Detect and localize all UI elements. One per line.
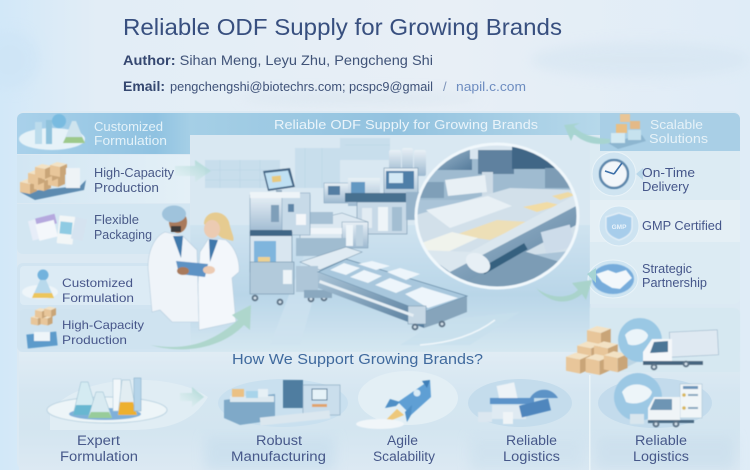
stage: reliable logistics one [468,379,572,427]
gmp certified item: GMP Certified [642,219,722,233]
customized formulation band: Customized [94,120,163,134]
stage labels: Reliable [635,433,687,448]
scalable solutions band [600,113,740,151]
customized formulation row: Customized [62,276,133,290]
on-time delivery item: Delivery [642,180,690,194]
stage labels: Manufacturing [231,449,326,464]
customized formulation row [20,266,180,305]
title: Reliable ODF Supply for Growing Brands [123,14,562,40]
high-capacity production row [17,155,190,203]
panel: right feature list [536,113,740,304]
panel: lower left features [17,263,190,352]
email line: pengchengshi@biotechrs.com; pcspc9@gmail [170,79,433,94]
main panel background [17,111,740,470]
factory scene [190,135,590,352]
on-time delivery item [592,152,695,196]
flexible packaging row [17,204,190,254]
email line: napil.c.com [456,79,526,94]
panel: how we support growing brands [19,308,740,470]
arrow: scalable to band [564,123,610,144]
middle cabinet [300,212,368,250]
strategic partnership item: Strategic [642,262,692,276]
lower panel backdrop [19,352,740,470]
stage labels: Formulation [60,449,138,464]
stage labels: Robust [256,433,302,448]
scalable solutions band: Scalable [650,118,703,132]
scientist: man [148,206,199,322]
clipboard [176,261,215,277]
customized formulation band: Formulation [94,134,167,148]
email line: Email: [123,79,165,94]
author line: Author: Sihan Meng, Leyu Zhu, Pengcheng Shi [123,53,433,68]
silver tanks [389,148,426,176]
stage: reliable logistics two [589,373,712,470]
magnifier circle detail [416,140,580,300]
stage: robust manufacturing [218,379,348,427]
scientists [148,206,239,330]
stage labels: Scalability [373,449,435,464]
customized formulation band [17,113,190,154]
high-capacity production row: High-Capacity [94,166,175,180]
stage: agile scalability [356,371,458,429]
email line [123,79,526,94]
stage labels: Logistics [503,449,560,464]
high-capacity production row: Production [62,333,127,347]
customized formulation row: Formulation [62,291,134,305]
flexible packaging row: Flexible [94,213,139,227]
arrow: production to factory [175,160,211,182]
high-capacity production row: Production [94,181,159,195]
arrow: partnership to factory [536,280,592,302]
gmp certified item: GMP [612,224,627,231]
conveyor with film sheets [318,259,467,330]
tablet monitor [263,168,295,196]
flexible packaging row: Packaging [94,228,152,242]
rear machines [324,168,429,234]
stage labels: Reliable [506,433,557,448]
section banner [190,113,600,135]
scalable solutions band: Solutions [649,132,708,146]
stage labels: Agile [387,433,418,448]
shipping illustration [565,308,740,375]
strategic partnership item [587,260,707,298]
factory back wall and floor [190,135,590,352]
strategic partnership item: Partnership [642,276,707,290]
arrow: swoosh into factory [150,305,251,349]
email line: / [443,79,447,94]
white arc under lens [420,320,495,345]
on-time delivery item: On-Time [642,166,695,180]
high-capacity production row [20,307,180,349]
stage labels: Expert [77,433,120,448]
scientist: woman [198,212,239,330]
stage labels [60,433,689,464]
gmp certified item [599,206,722,246]
left machine cluster [250,192,362,305]
high-capacity production row: High-Capacity [62,318,144,332]
section banner: Reliable ODF Supply for Growing Brands [274,118,538,132]
section heading: How We Support Growing Brands? [232,351,483,368]
panel: left feature list [17,113,211,254]
stage: expert formulation [47,378,208,430]
stage labels: Logistics [633,449,689,464]
arrow: formulation to manufacturing [180,387,204,407]
